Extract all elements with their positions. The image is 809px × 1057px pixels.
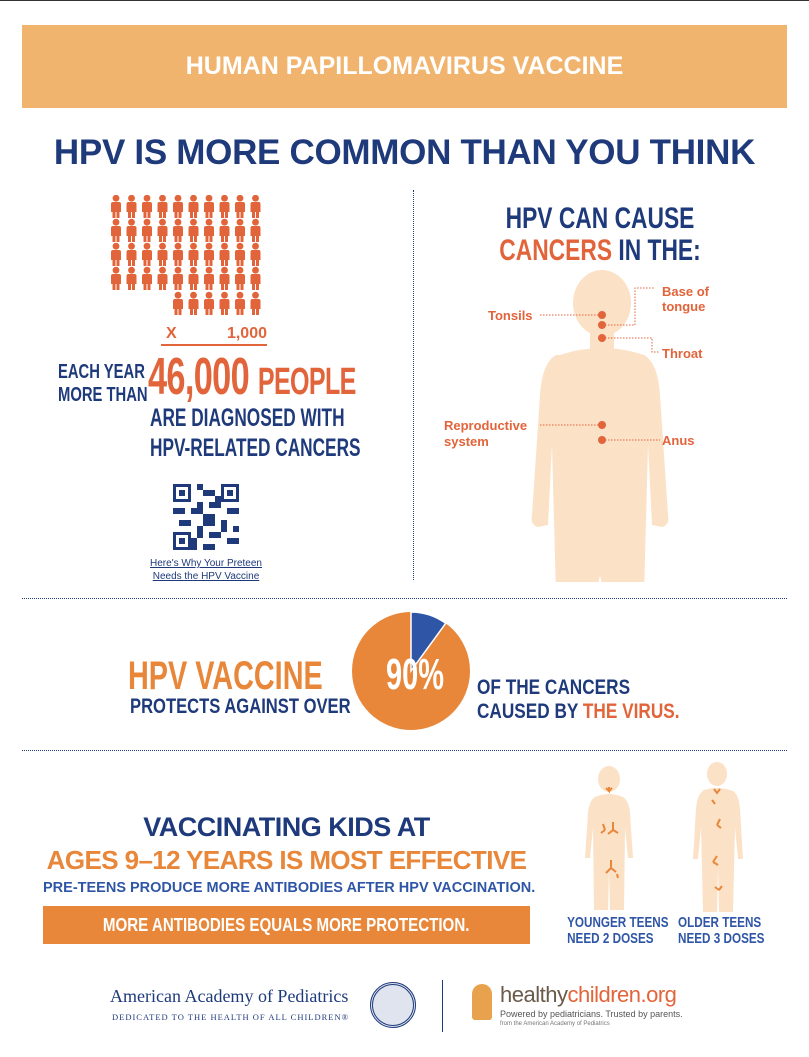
AAP logo <box>110 982 416 1028</box>
healthychildren logo: from the American Academy of Pediatrics <box>500 1021 610 1027</box>
QR caption link: Needs the HPV Vaccine <box>153 571 259 582</box>
vaccinating heading: PRE-TEENS PRODUCE MORE ANTIBODIES AFTER HPV VACCINATION. <box>43 880 535 896</box>
AAP logo: American Academy of Pediatrics <box>110 986 348 1006</box>
people icon grid <box>111 195 260 315</box>
healthychildren logo: Powered by pediatricians. Trusted by parents. <box>500 1009 683 1019</box>
body diagram: Throat <box>662 346 703 361</box>
body diagram <box>444 270 710 582</box>
cancers heading <box>499 202 701 267</box>
AAP logo: DEDICATED TO THE HEALTH OF ALL CHILDREN® <box>112 1012 349 1022</box>
body diagram: system <box>444 434 489 449</box>
body diagram: Anus <box>662 433 694 448</box>
orange bar <box>43 906 530 944</box>
cancers heading: CANCERS IN THE: <box>499 234 701 267</box>
vaccine text right <box>477 676 680 723</box>
banner <box>22 25 787 108</box>
dose captions: OLDER TEENS <box>678 914 761 931</box>
stat text: 46,000 PEOPLE <box>148 348 356 406</box>
QR caption link: Here's Why Your Preteen <box>150 558 262 569</box>
pie chart 90% <box>352 612 470 730</box>
dose captions: YOUNGER TEENS <box>567 914 669 931</box>
heading: HPV IS MORE COMMON THAN YOU THINK <box>54 133 755 172</box>
stat text <box>58 348 361 462</box>
teen figures <box>585 762 743 912</box>
dose captions: NEED 3 DOSES <box>678 930 764 947</box>
cancers heading: HPV CAN CAUSE <box>506 202 694 235</box>
stat text: MORE THAN <box>58 384 148 406</box>
banner: HUMAN PAPILLOMAVIRUS VACCINE <box>186 52 623 80</box>
vaccine text right: OF THE CANCERS <box>477 676 630 699</box>
healthychildren logo <box>472 982 683 1027</box>
body diagram: Tonsils <box>488 308 533 323</box>
dose captions <box>567 914 764 947</box>
vaccine text left: HPV VACCINE <box>128 654 323 698</box>
vaccinating heading: AGES 9–12 YEARS IS MOST EFFECTIVE <box>47 845 526 875</box>
multiplier <box>161 325 267 346</box>
vaccine text left: PROTECTS AGAINST OVER <box>130 695 351 718</box>
vaccinating heading <box>43 812 535 896</box>
body diagram: tongue <box>662 299 705 314</box>
vaccine text left <box>128 654 351 718</box>
orange bar: MORE ANTIBODIES EQUALS MORE PROTECTION. <box>103 915 470 935</box>
dose captions: NEED 2 DOSES <box>567 930 654 947</box>
stat text: EACH YEAR <box>58 361 145 383</box>
stat text: ARE DIAGNOSED WITH <box>150 404 345 432</box>
body diagram: Reproductive <box>444 418 527 433</box>
body diagram: Base of <box>662 284 710 299</box>
vaccine text right: CAUSED BY THE VIRUS. <box>477 700 680 723</box>
vaccinating heading: VACCINATING KIDS AT <box>143 812 430 842</box>
healthychildren logo: healthychildren.org <box>500 982 676 1007</box>
QR caption link <box>150 558 262 582</box>
multiplier: 1,000 <box>227 325 267 342</box>
multiplier: X <box>166 325 177 342</box>
QR code <box>173 484 239 550</box>
stat text: HPV-RELATED CANCERS <box>150 434 361 462</box>
